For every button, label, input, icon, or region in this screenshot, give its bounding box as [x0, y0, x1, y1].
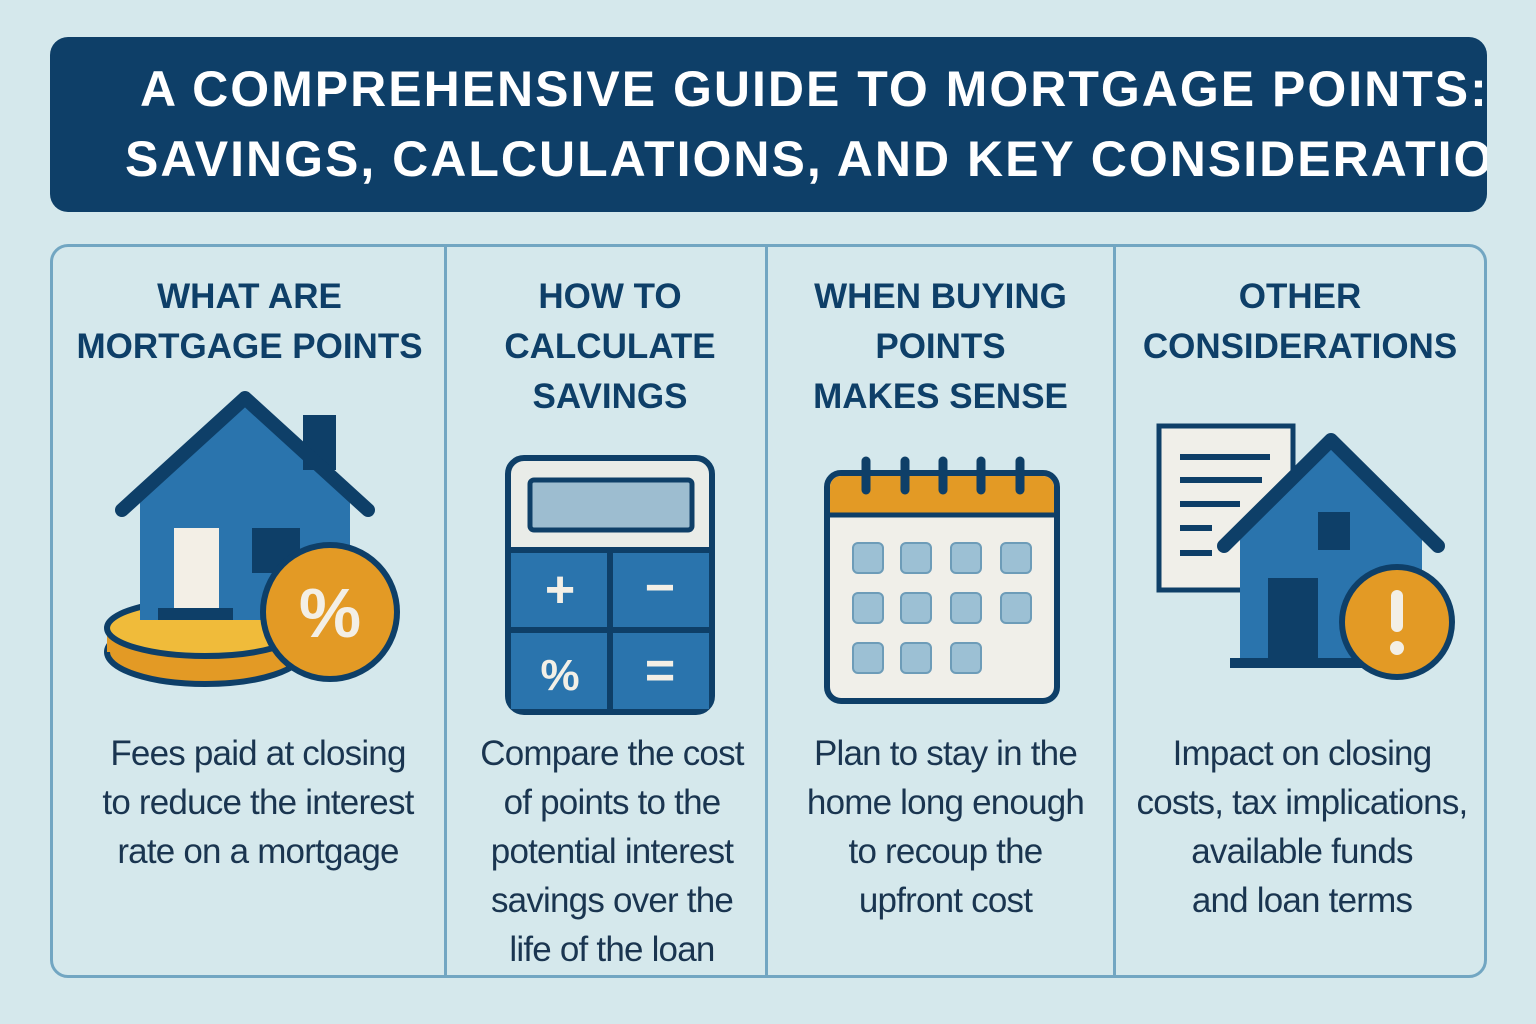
icon: calculator [508, 458, 712, 712]
body text: calculate: savings over the [491, 881, 733, 920]
body text: calculate: life of the loan [509, 930, 715, 969]
heading: other considerations [1143, 277, 1457, 366]
icon: document, house and alert [1159, 426, 1452, 677]
heading: when buying: MAKES SENSE [813, 377, 1068, 416]
body text: definition: rate on a mortgage [117, 832, 399, 871]
heading: other considerations: OTHER [1239, 277, 1361, 316]
body text: definition [102, 734, 414, 871]
icon: house with coin and percent: % [299, 574, 361, 652]
body text: other: costs, tax implications, [1137, 783, 1467, 822]
heading: how to calculate: CALCULATE [504, 327, 716, 366]
body text: when [807, 734, 1084, 920]
body text: calculate: of points to the [504, 783, 720, 822]
icon: calculator: + [545, 561, 575, 619]
body text: calculate: potential interest [491, 832, 733, 871]
title banner: A COMPREHENSIVE GUIDE TO MORTGAGE POINTS: [140, 61, 1487, 117]
heading: when buying [813, 277, 1068, 416]
body text: when: home long enough [807, 783, 1084, 822]
body text: definition: Fees paid at closing [110, 734, 406, 773]
heading: how to calculate: HOW TO [538, 277, 682, 316]
icon: calculator: % [540, 651, 580, 700]
body text: other: and loan terms [1192, 881, 1412, 920]
icon: calculator: − [645, 559, 675, 617]
heading: other considerations: CONSIDERATIONS [1143, 327, 1457, 366]
icon: calculator: = [645, 642, 675, 700]
heading: how to calculate: SAVINGS [533, 377, 687, 416]
title banner [50, 37, 1487, 212]
heading: when buying: WHEN BUYING [814, 277, 1067, 316]
body text: calculate [480, 734, 744, 969]
body text: other [1137, 734, 1467, 920]
body text: when: to recoup the [849, 832, 1042, 871]
heading: when buying: POINTS [875, 327, 1006, 366]
heading: what are mortgage points: MORTGAGE POINTS [76, 327, 423, 366]
content panel frame [50, 244, 1487, 978]
heading: what are mortgage points: WHAT ARE [157, 277, 342, 316]
body text: when: Plan to stay in the [814, 734, 1077, 773]
heading: how to calculate [504, 277, 716, 416]
body text: calculate: Compare the cost [480, 734, 744, 773]
icon: house with coin and percent [107, 398, 397, 684]
body text: other: available funds [1191, 832, 1413, 871]
heading: what are mortgage points [76, 277, 423, 366]
body text: other: Impact on closing [1173, 734, 1431, 773]
body text: when: upfront cost [859, 881, 1032, 920]
icon: calendar [827, 461, 1057, 701]
body text: definition: to reduce the interest [102, 783, 414, 822]
